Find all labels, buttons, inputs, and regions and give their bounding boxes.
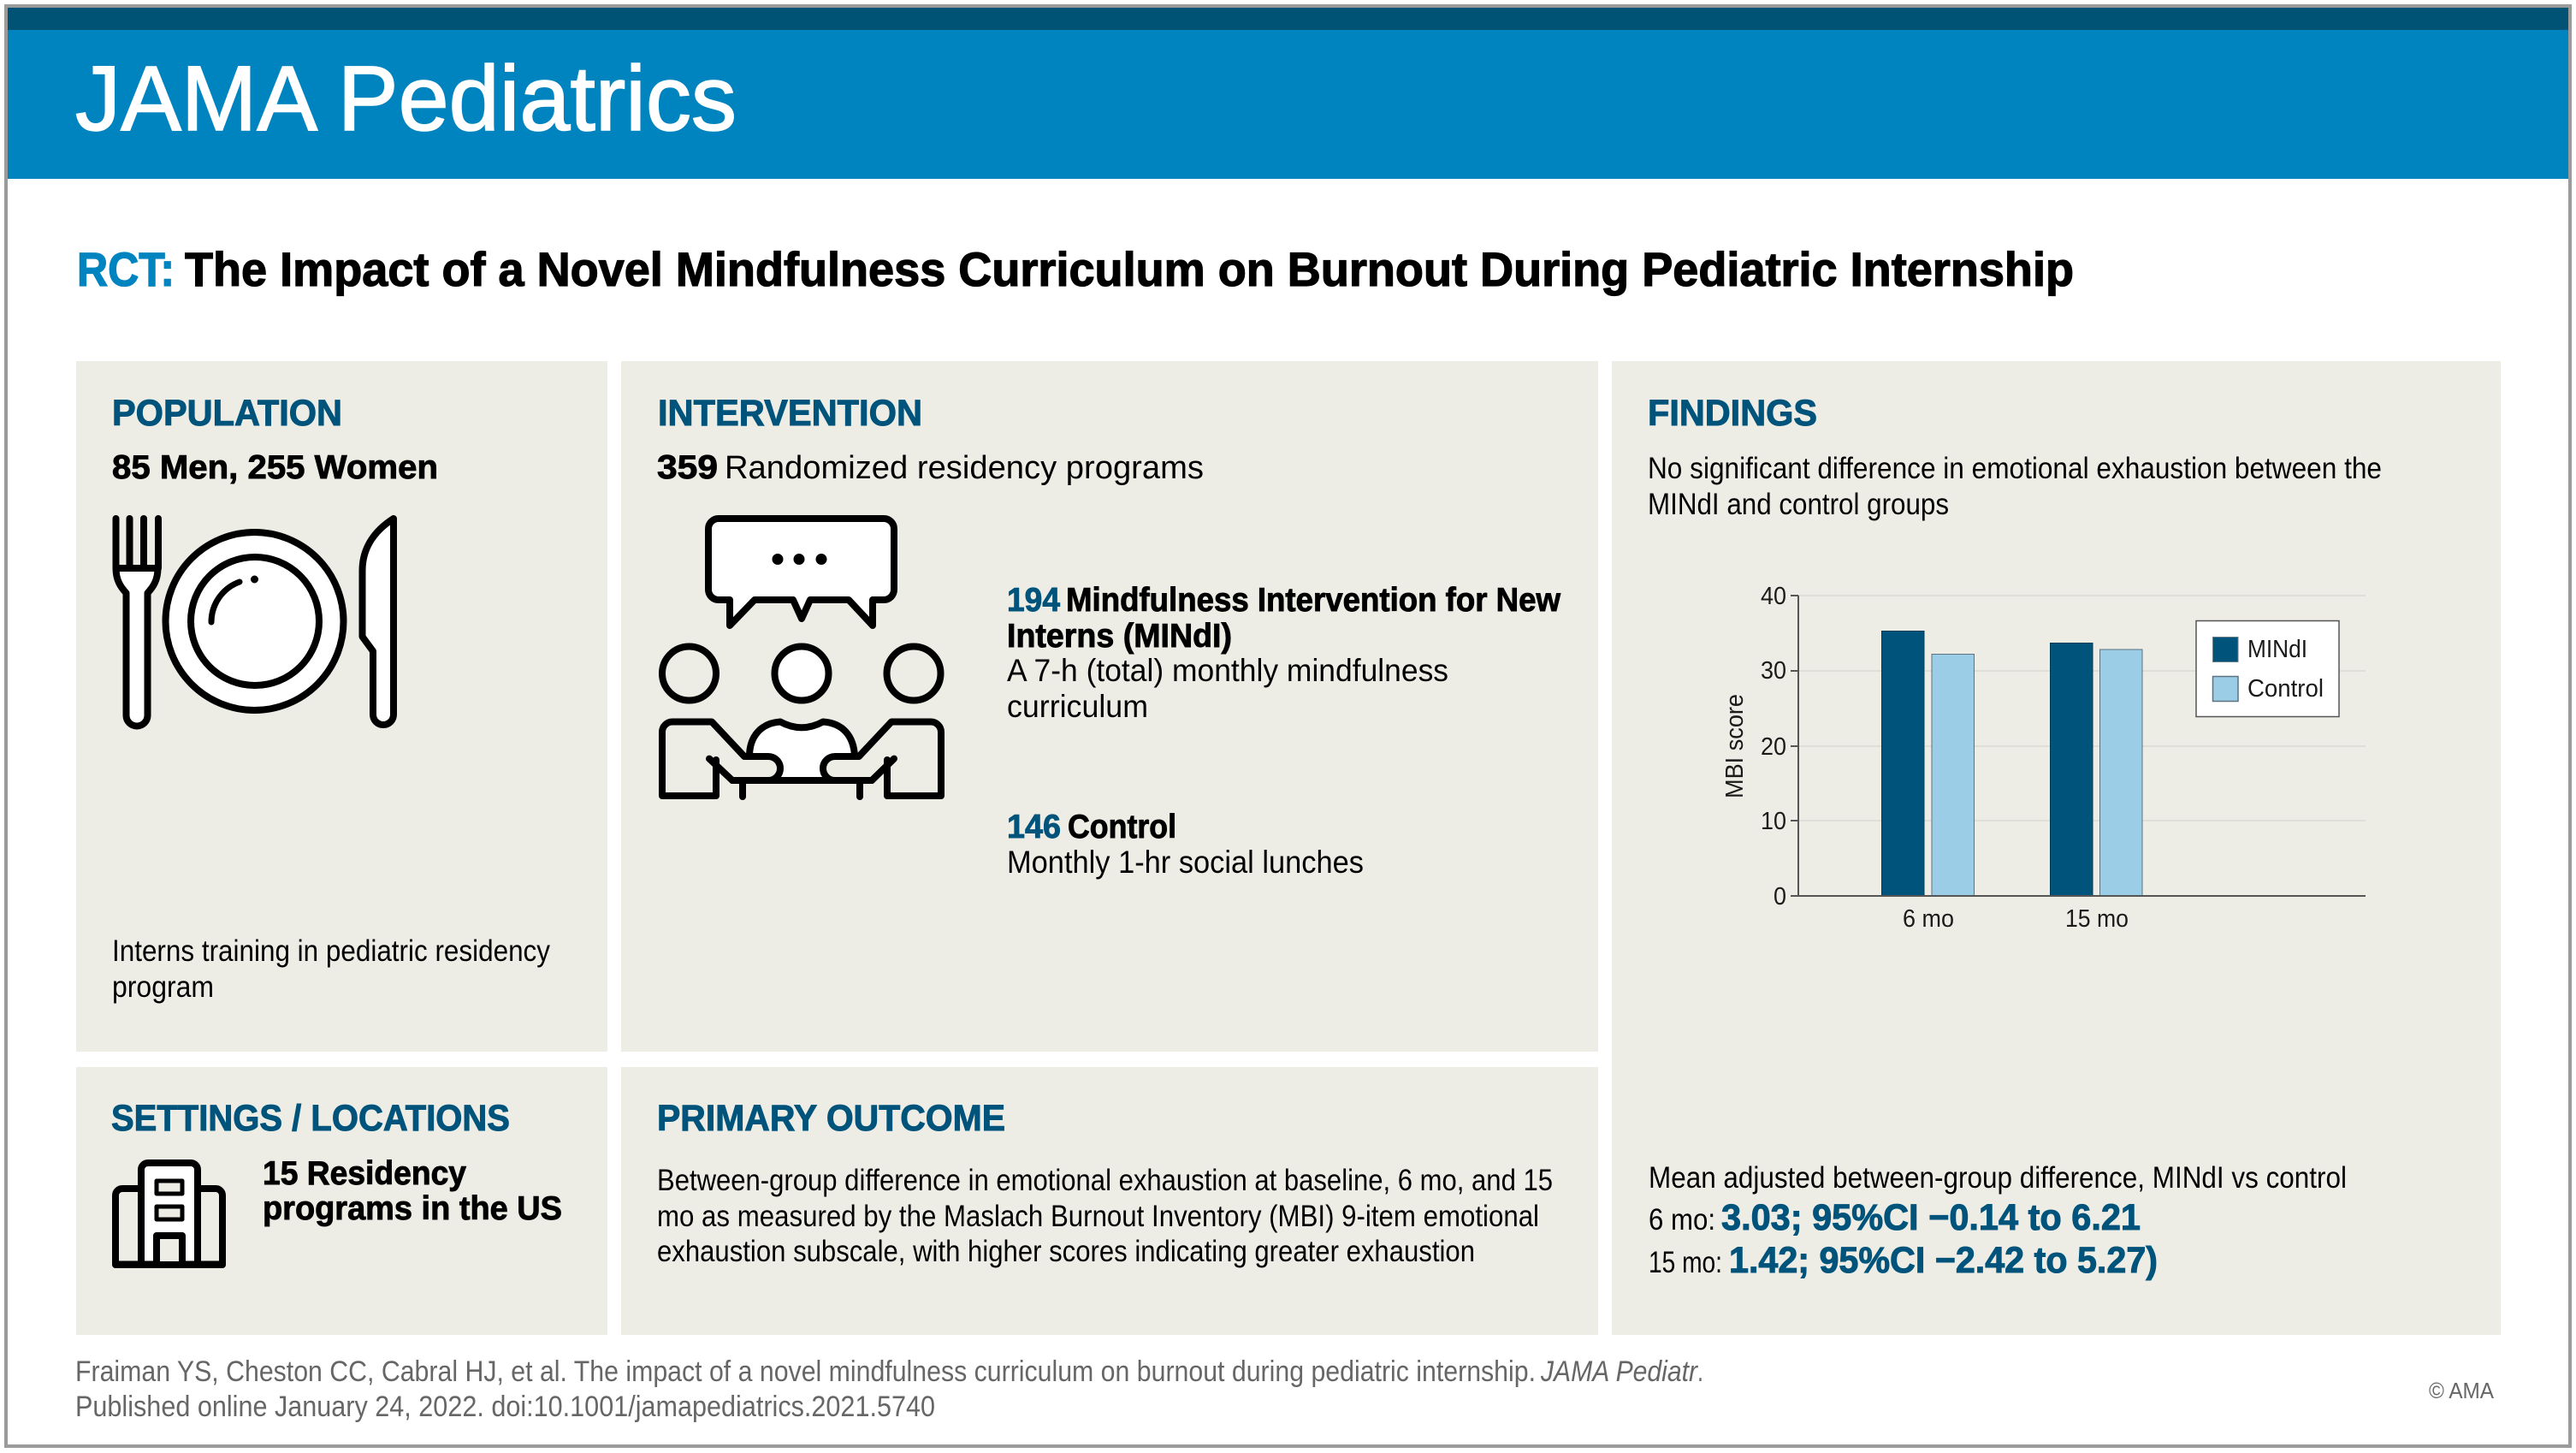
legend: MINdI xyxy=(2247,636,2307,663)
population description: program xyxy=(112,970,214,1004)
icon: group conversation xyxy=(662,519,941,797)
y-axis labels xyxy=(1761,583,1786,910)
title: RCT: xyxy=(77,242,175,296)
y-axis labels: 0 xyxy=(1774,883,1786,910)
y-axis labels: 30 xyxy=(1761,657,1786,685)
heading: findings: FINDINGS xyxy=(1648,393,1817,434)
between-group difference results: 15 mo: xyxy=(1649,1246,1722,1279)
bar chart xyxy=(1721,583,2366,933)
control arm: Control xyxy=(1068,809,1176,845)
citation footer: Published online January 24, 2022. doi:10.1001/jamapediatrics.2021.5740 xyxy=(75,1391,935,1423)
findings summary: No significant difference in emotional exhaustion between the xyxy=(1648,452,2382,485)
population description: Interns training in pediatric residency xyxy=(112,934,550,968)
MINDI arm: 194 xyxy=(1007,582,1060,619)
bars: 15 mo xyxy=(2050,643,2142,896)
primary outcome text: mo as measured by the Maslach Burnout Inventory (MBI) 9-item emotional xyxy=(657,1200,1539,1233)
settings text: programs in the US xyxy=(263,1190,562,1227)
between-group difference results xyxy=(1649,1161,2347,1281)
copyright: © AMA xyxy=(2429,1378,2495,1403)
header banner xyxy=(8,8,2568,179)
citation footer xyxy=(75,1355,1703,1423)
citation footer: JAMA Pediatr xyxy=(1540,1355,1698,1388)
primary outcome text: exhaustion subscale, with higher scores indicating greater exhaustion xyxy=(657,1235,1475,1268)
population counts: 85 Men, 255 Women xyxy=(112,449,438,486)
header banner: JAMA Pediatrics xyxy=(75,46,737,150)
x-axis labels: 15 mo xyxy=(2065,905,2129,933)
MINDI arm xyxy=(1007,582,1561,724)
primary outcome text: Between-group difference in emotional exhaustion at baseline, 6 mo, and 15 xyxy=(657,1164,1553,1197)
citation footer: . xyxy=(1697,1355,1703,1388)
between-group difference results: 3.03; 95%CI −0.14 to 6.21 xyxy=(1721,1197,2141,1238)
population description xyxy=(112,934,550,1004)
control arm: 146 xyxy=(1007,809,1061,845)
panel: intervention xyxy=(621,361,1598,1052)
findings summary xyxy=(1648,452,2382,521)
icon: plate with fork and knife xyxy=(116,519,394,726)
MINDI arm: Interns (MINdI) xyxy=(1007,618,1232,655)
x-axis labels: 6 mo xyxy=(1903,905,1954,933)
panel: primary outcome xyxy=(621,1067,1598,1335)
MINDI arm: A 7-h (total) monthly mindfulness xyxy=(1007,653,1448,688)
between-group difference results: Mean adjusted between-group difference, MINdI vs control xyxy=(1649,1161,2347,1195)
y-axis labels: 40 xyxy=(1761,583,1786,610)
bars: 6 mo xyxy=(1882,632,1975,896)
axes xyxy=(1791,596,2366,896)
control arm xyxy=(1007,809,1364,880)
primary outcome text xyxy=(657,1164,1553,1268)
heading: settings: SETTINGS / LOCATIONS xyxy=(111,1098,510,1139)
settings text: 15 Residency xyxy=(263,1155,466,1192)
heading: intervention: INTERVENTION xyxy=(658,393,922,434)
between-group difference results: 1.42; 95%CI −2.42 to 5.27) xyxy=(1729,1240,2158,1281)
heading: population: POPULATION xyxy=(112,393,342,434)
control arm: Monthly 1-hr social lunches xyxy=(1007,845,1364,880)
MINDI arm: curriculum xyxy=(1007,689,1148,724)
citation footer: Fraiman YS, Cheston CC, Cabral HJ, et al. The impact of a novel mindfulness curriculum on burnout during pediatric internship. xyxy=(75,1355,1536,1388)
legend xyxy=(2196,621,2339,717)
x-axis labels xyxy=(1903,905,2129,933)
panel: population xyxy=(76,361,607,1052)
y-axis labels: 20 xyxy=(1761,733,1786,761)
panel: settings and locations xyxy=(76,1067,607,1335)
panel: findings xyxy=(1612,361,2501,1335)
settings text xyxy=(263,1155,562,1227)
icon: building xyxy=(115,1163,222,1265)
findings summary: MINdI and control groups xyxy=(1648,488,1949,521)
heading: primary outcome: PRIMARY OUTCOME xyxy=(657,1098,1005,1139)
randomized count: 359 xyxy=(657,449,718,486)
y-axis title: MBI score xyxy=(1721,694,1749,798)
MINDI arm: Mindfulness Intervention for New xyxy=(1066,582,1561,619)
between-group difference results: 6 mo: xyxy=(1649,1203,1715,1237)
legend: Control xyxy=(2247,675,2324,703)
title: The Impact of a Novel Mindfulness Curriculum on Burnout During Pediatric Internship xyxy=(185,242,2074,296)
y-axis labels: 10 xyxy=(1761,808,1786,835)
randomized count: Randomized residency programs xyxy=(725,450,1204,486)
